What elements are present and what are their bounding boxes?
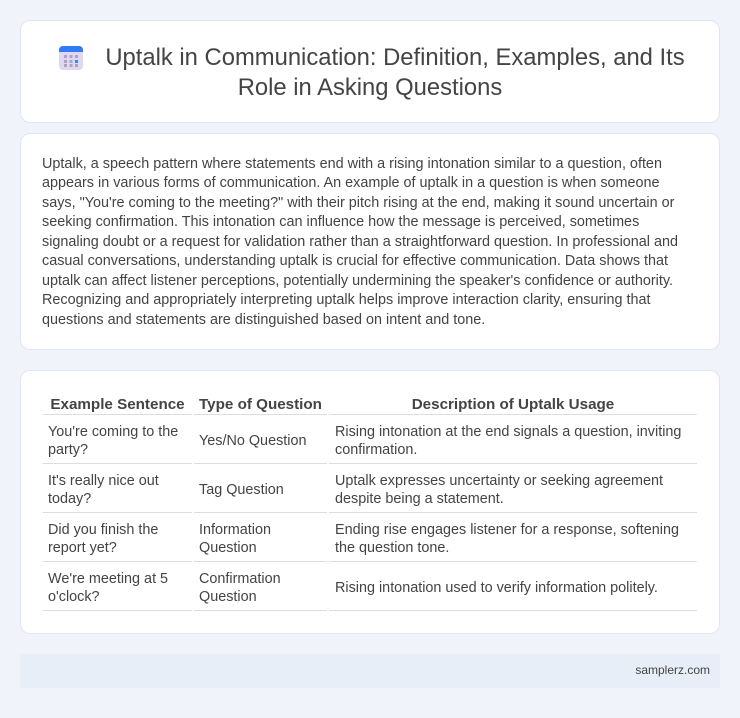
table row 1: confirmation. [335,442,417,458]
table row 3: Question [199,540,257,556]
panel: table card [20,370,720,634]
text block: introduction: seeking confirmation. This intonation can influence how the message is perceived, sometimes [42,214,639,230]
table row 3: the question tone. [335,540,449,556]
table row 2: today? [48,491,91,507]
text block: introduction: says, "You're coming to the meeting?" with their pitch rising at the end, making it sound uncertain or [42,195,674,211]
table header: Example Sentence [50,396,185,413]
footer text: samplerz.com [635,663,710,677]
text block: introduction: uptalk can affect listener perceptions, potentially undermining the speaker's confidence or authority. [42,273,673,289]
icon: calendar [59,46,83,70]
table row 2: despite being a statement. [335,491,504,507]
table header: Description of Uptalk Usage [412,396,614,413]
table row 1: party? [48,442,88,458]
table row 4: Rising intonation used to verify information politely. [335,580,658,596]
table row 4: Question [199,589,257,605]
table row 2 [48,473,663,507]
table row 3 [48,522,679,556]
table header: Type of Question [199,396,322,413]
table row 3: Did you finish the [48,522,158,538]
text block: introduction: casual conversations, understanding uptalk is crucial for effective communication. Data shows that [42,253,668,269]
text block: introduction: signaling doubt or a request for validation rather than a straightforward question. In professional and [42,234,678,250]
text block: introduction: appears in various forms of communication. An example of uptalk in a question is when someone [42,175,660,191]
table row 4 [48,571,658,605]
table row 4: Confirmation [199,571,281,587]
table row 2: Tag Question [199,482,284,498]
table header [50,396,614,413]
footer bar [20,654,720,688]
table row 4: We're meeting at 5 [48,571,168,587]
table [43,396,697,611]
table row 3: report yet? [48,540,117,556]
title: Uptalk in Communication: Definition, Examples, and Its [105,44,685,71]
text block: introduction: questions and statements are distinguished based on intent and tone. [42,312,485,328]
title: Role in Asking Questions [238,74,502,101]
table row 2: It's really nice out [48,473,159,489]
table row 2: Uptalk expresses uncertainty or seeking agreement [335,473,663,489]
text block: introduction: Recognizing and appropriately interpreting uptalk helps improve interaction clarity, ensuring that [42,292,650,308]
table row 1 [48,424,681,458]
table row 3: Information [199,522,271,538]
text block: introduction: Uptalk, a speech pattern where statements end with a rising intonation similar to a question, often [42,156,662,172]
table row 1: You're coming to the [48,424,178,440]
table row 1: Rising intonation at the end signals a question, inviting [335,424,681,440]
table row 1: Yes/No Question [199,433,306,449]
title [105,44,685,101]
panel: introduction card [20,133,720,350]
table row 4: o'clock? [48,589,100,605]
table row 3: Ending rise engages listener for a response, softening [335,522,679,538]
panel: title card [20,20,720,123]
text block: introduction [42,156,678,328]
